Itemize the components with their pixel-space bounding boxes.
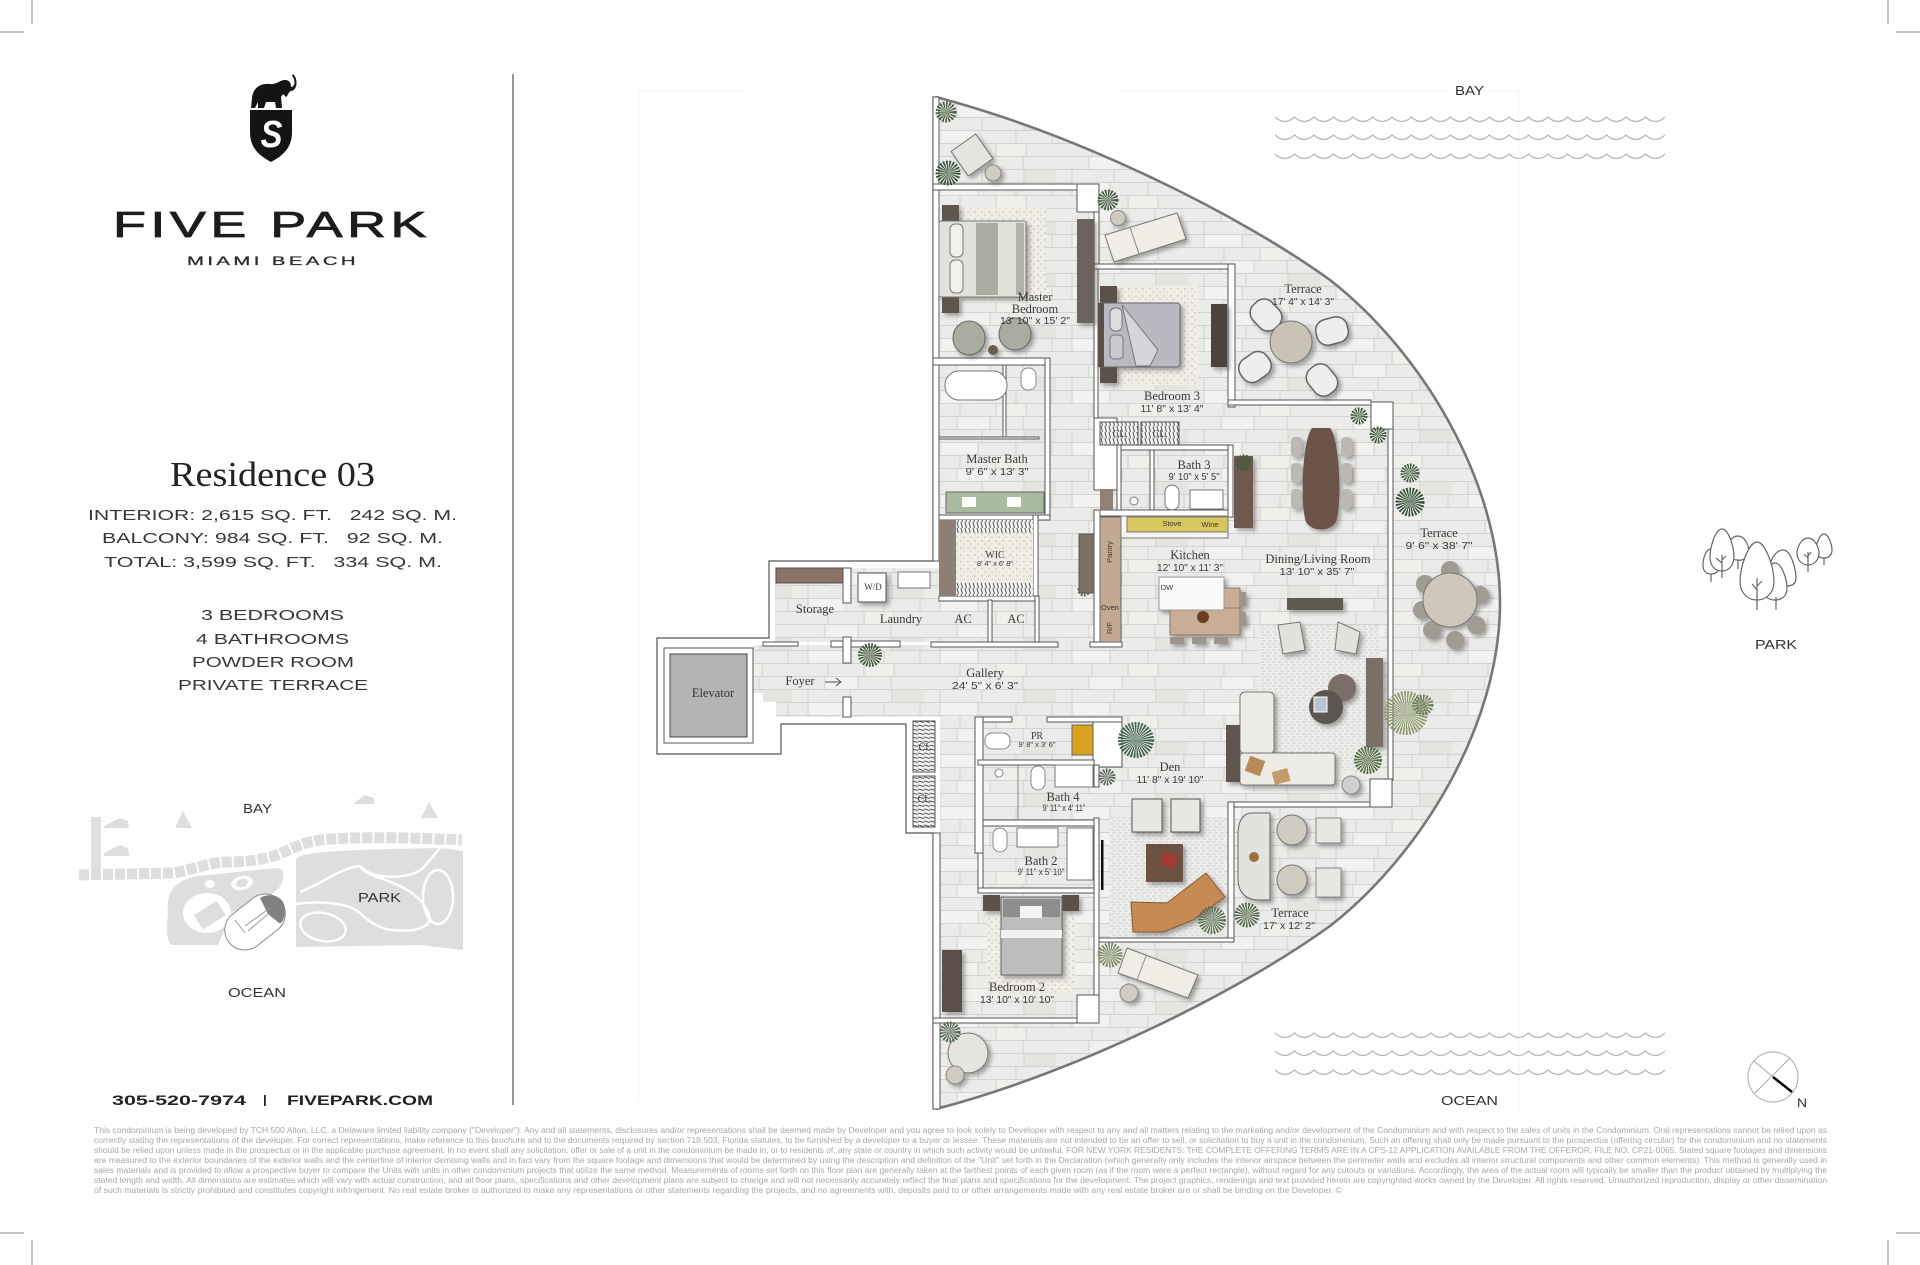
room labels: CL [919, 742, 931, 753]
room labels: Laundry [880, 612, 923, 626]
furniture: den [1101, 799, 1225, 937]
kitchen: pantry, oven and counter: Wine [1201, 520, 1219, 529]
room labels: Bedroom 3 [1144, 389, 1200, 403]
brick flooring [753, 98, 1500, 1108]
furniture: bedroom 2 [942, 895, 1079, 1012]
kitchen: pantry, oven and counter [1100, 516, 1228, 642]
room labels: Gallery [966, 666, 1004, 680]
waves: ocean [1275, 1033, 1665, 1074]
room labels: Bath 3 [1178, 458, 1210, 472]
wordmark: MIAMI BEACH: MIAMI BEACH [187, 255, 359, 268]
room labels: W/D [864, 582, 882, 592]
elevator [664, 648, 753, 743]
key map: park lawn [296, 848, 463, 950]
key map: dock and boats [91, 795, 438, 880]
room labels: CL [918, 794, 930, 805]
room labels: 11' 8" x 13' 4" [1140, 404, 1204, 415]
room labels: Bath 2 [1025, 854, 1057, 868]
room labels: 9' 10" x 5' 5" [1168, 472, 1220, 483]
text block: areas [88, 507, 457, 571]
room labels [785, 282, 1473, 1006]
room labels: Terrace [1420, 526, 1458, 540]
room labels: 13' 10" x 15' 2" [1000, 316, 1070, 327]
room labels: CL [1113, 429, 1125, 440]
furniture: dining room [1234, 428, 1352, 530]
key map: labels: BAY [243, 802, 273, 816]
panel: floor plan [657, 97, 1500, 1109]
room labels: 9' 6" x 13' 3" [966, 467, 1029, 478]
kitchen text: DW: DW [1161, 583, 1174, 592]
kitchen: pantry, oven and counter: R/F [1105, 622, 1114, 634]
room labels: WIC [985, 550, 1005, 561]
text block: features: PRIVATE TERRACE [178, 677, 368, 694]
text block: legal disclaimer: should be relied upon unless made in the prospectus or in the applicable purchase agreement. In no event shall any solicitation, offer or sale of a unit in the condominium be made in, or to residents of, any state or country in which such activity would be unlawful. FOR NEW YORK RESIDENTS: THE COMPLETE OFFERING TERMS ARE IN A CPS-12 APPLICATION AVAILABLE FROM THE OFFEROR, FILE NO. CP21-0065. Stated square footages and dimensions [94, 1145, 1828, 1155]
floor plate [657, 97, 1500, 1109]
furniture: lower terrace [1238, 813, 1341, 900]
elevator: Elevator [692, 686, 735, 700]
room labels: Den [1160, 760, 1181, 774]
furniture: bedroom 3 [1098, 286, 1227, 385]
text block: legal disclaimer [94, 1125, 1828, 1195]
icon: compass: N [1797, 1096, 1807, 1110]
key map: labels: PARK [358, 891, 402, 905]
fixtures: master bath [945, 368, 1044, 513]
arrow: foyer entry [825, 678, 841, 686]
room labels: 9' 11" x 5' 10" [1018, 867, 1064, 877]
room labels: 17' 4" x 14' 3" [1272, 297, 1334, 308]
text block: areas: TOTAL: 3,599 SQ. FT. 334 SQ. M. [104, 554, 442, 571]
room labels: 13' 10" x 10' 10" [980, 995, 1054, 1006]
icon: compass [1748, 1052, 1807, 1110]
room labels: Storage [796, 602, 835, 616]
closets [913, 422, 1179, 827]
room labels: 9' 6" x 38' 7" [1406, 541, 1473, 552]
faint layout lines [639, 91, 1520, 1115]
contact line: FIVEPARK.COM [287, 1092, 433, 1108]
room labels: 13' 10" x 35' 7" [1280, 567, 1355, 578]
room labels: 17' x 12' 2" [1263, 921, 1315, 932]
title: Residence 03: Residence 03 [170, 455, 375, 494]
curved terrace railing [936, 97, 1500, 1109]
room labels: 11' 8" x 19' 10" [1136, 775, 1204, 786]
text block: legal disclaimer: stated length and width. All dimensions are estimates which will vary with actual construction, and all floor plans, specifications and other development plans are subject to change and will not necessarily accurately reflect the final plans and specifications for the development. The project graphics, renderings and text provided herein are copyrighted works owned by the Developer. All rights reserved. Unauthorized reproduction, display or other dissemination [94, 1175, 1827, 1185]
icon: park trees [1703, 529, 1832, 610]
text block: legal disclaimer: of such materials is strictly prohibited and constitutes copyright infringement. No real estate broker is authorized to make any representations or other statements regarding the projects, and no agreements with, deposits paid to or other arrangements made with any real estate broker are or shall be binding on the Developer. © [94, 1185, 1343, 1195]
furniture: top terrace [951, 134, 1186, 262]
furniture: lower terrace chaise and lounge [946, 948, 1198, 1084]
room labels: Terrace [1284, 282, 1322, 296]
room labels: Master [1018, 290, 1053, 304]
label: BAY: BAY [1455, 84, 1485, 98]
key map: labels: OCEAN [228, 986, 286, 1000]
wordmark: FIVE PARK: FIVE PARK [113, 204, 431, 245]
furniture: upper terrace dining [1234, 294, 1351, 401]
contact line [112, 1092, 433, 1108]
text block: features: 4 BATHROOMS [196, 631, 349, 648]
logo: elephant and shield: S [260, 114, 282, 156]
contact line: 305-520-7974 [112, 1092, 246, 1108]
room labels: Kitchen [1170, 548, 1211, 562]
room labels: Dining/Living Room [1265, 552, 1371, 566]
room labels: 24' 5" x 6' 3" [952, 681, 1019, 692]
walk-in closet [939, 520, 1033, 596]
fixtures: powder room, bath 4, bath 2 [985, 725, 1093, 880]
walls [763, 97, 1393, 1109]
room labels: Master Bath [966, 452, 1028, 466]
text block: legal disclaimer: correctly stating the representations of the developer. For correct representations, make reference to this brochure and to the documents required by section 718.503, Florida statutes, to be furnished by a developer to a buyer or lessee. These materials are not intended to be an offer to sell, or solicitation to buy a unit in the condominium. Such an offering shall only be made pursuant to the prospectus (offering circular) for the condominium and no statements [94, 1135, 1828, 1145]
fixtures: laundry and storage [776, 568, 930, 602]
room labels: Terrace [1271, 906, 1309, 920]
text block: legal disclaimer: This condominium is being developed by TCH 500 Alton, LLC, a Delaware limited liability company ("Developer"). Any and all statements, disclosures and/or representations shall be deemed made by Developer and you agree to look solely to Developer with respect to any and all matters relating to the marketing and/or development of the Condominium and with respect to the sales of units in the Condominium. Oral representations cannot be relied upon as [94, 1125, 1828, 1135]
divider rule [512, 74, 514, 1105]
room labels: 9' 8" x 3' 6" [1018, 740, 1056, 749]
room labels: AC [1007, 612, 1025, 626]
furniture: east terrace dining [1413, 561, 1489, 649]
fixtures: bath 3 [1100, 485, 1223, 510]
room labels: 8' 4" x 6' 8" [977, 559, 1013, 568]
plants [864, 107, 1428, 1037]
key map: building footprint [217, 886, 293, 958]
room labels: Bedroom [1012, 302, 1059, 316]
kitchen: pantry, oven and counter: Stove [1162, 519, 1182, 528]
text block: features: 3 BEDROOMS [201, 607, 344, 624]
kitchen: pantry, oven and counter: Oven [1101, 603, 1119, 612]
text block: legal disclaimer: are measured to the exterior boundaries of the exterior walls and the centerline of interior demising walls and in fact vary from the square footage and dimensions that would be determined by using the description and definition of the "Unit" set forth in the Declaration (which generally only includes the interior airspace between the perimeter walls and excludes all interior structural components and other common elements). This method is generally used in [94, 1155, 1827, 1165]
label: OCEAN: OCEAN [1441, 1094, 1498, 1108]
room labels: AC [954, 612, 972, 626]
waves: bay [1275, 117, 1665, 158]
room labels: Bath 4 [1047, 790, 1080, 804]
room labels: CL [1153, 429, 1165, 440]
text block: features [178, 607, 368, 694]
text block: areas: INTERIOR: 2,615 SQ. FT. 242 SQ. M. [88, 507, 457, 524]
text block: legal disclaimer: sales materials and is provided to allow a prospective buyer to compare the Units with units in other condominium projects that utilize the same method. Measurements of rooms set forth on this floor plan are generally taken at the farthest points of each given room (as if the room were a perfect rectangle), without regard for any cutouts or variations. Accordingly, the area of the actual room will typically be smaller than the product obtained by multiplying the [94, 1165, 1827, 1175]
room labels: 12' 10" x 11' 3" [1157, 563, 1223, 574]
entry console [1079, 534, 1094, 593]
key map: left garden [167, 868, 283, 945]
furniture: master bedroom [939, 205, 1094, 355]
key map: site plan [79, 795, 463, 1000]
key map: labels [228, 802, 402, 1000]
text block: areas: BALCONY: 984 SQ. FT. 92 SQ. M. [102, 530, 443, 547]
room labels: Bedroom 2 [989, 980, 1045, 994]
furniture: living room [1226, 598, 1383, 794]
label: PARK: PARK [1755, 638, 1798, 652]
text block: features: POWDER ROOM [192, 654, 354, 671]
room labels: Foyer [785, 674, 815, 688]
room labels: 9' 11" x 4' 11" [1042, 803, 1086, 813]
logo: elephant and shield [250, 74, 297, 162]
room labels: PR [1031, 731, 1043, 742]
kitchen island [1159, 577, 1246, 644]
key map: shoreline path [79, 838, 462, 875]
kitchen: pantry, oven and counter: Pantry [1105, 541, 1114, 563]
